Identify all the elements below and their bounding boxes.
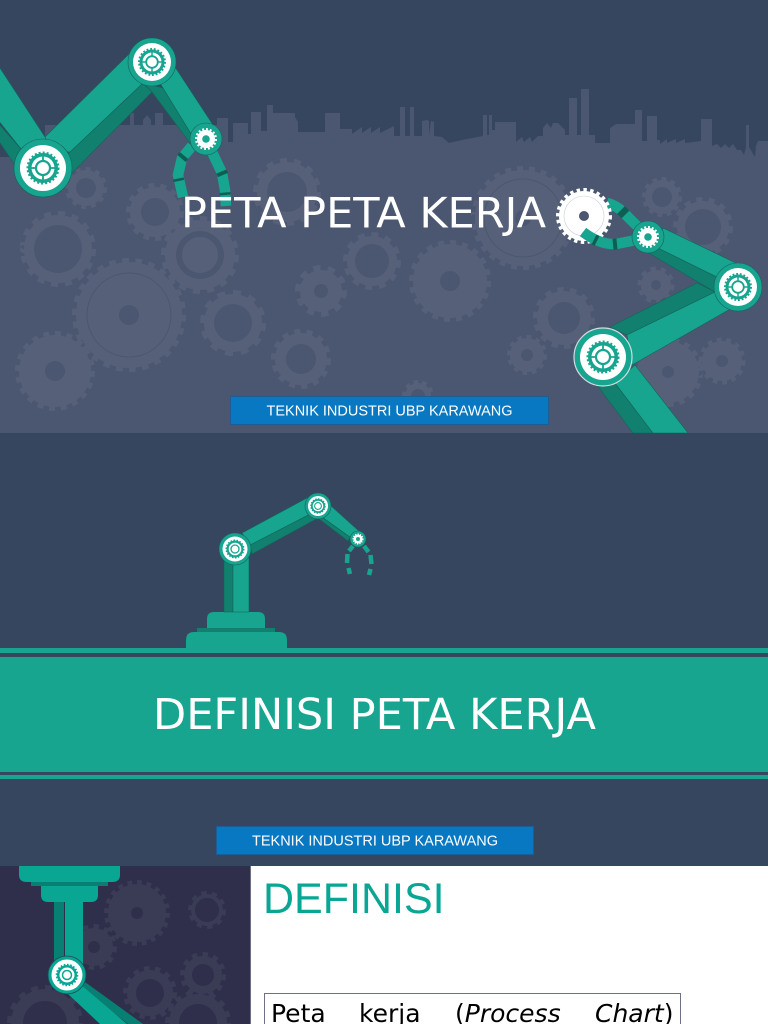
- subtitle banner: [230, 396, 548, 424]
- definition text box: [264, 994, 680, 1024]
- joint: wrist gear: [632, 221, 664, 253]
- white gear held by claw: [559, 191, 609, 241]
- joint: elbow gear: [714, 263, 762, 311]
- gripper claw left: [178, 146, 192, 197]
- subtitle banner: [216, 826, 534, 854]
- panel: section slide: [0, 433, 768, 866]
- gripper claw right: [212, 152, 226, 206]
- joint: wrist gear: [350, 531, 366, 547]
- gripper claw bottom: [583, 232, 636, 244]
- subtitle banner: TEKNIK INDUSTRI UBP KARAWANG: [252, 834, 498, 850]
- joint: gear: [48, 956, 86, 994]
- subtitle banner: TEKNIK INDUSTRI UBP KARAWANG: [266, 404, 512, 420]
- robot arm: right holding gear: [559, 191, 762, 433]
- joint: base gear: [574, 328, 632, 386]
- joint: elbow gear: [305, 493, 331, 519]
- teal title band: [0, 648, 768, 779]
- panel: definition slide left: [0, 866, 251, 1024]
- background gears: [11, 884, 227, 1024]
- joint: elbow gear: [128, 38, 176, 86]
- background gears: [19, 162, 742, 409]
- joint: large gear: [14, 139, 72, 197]
- robot arm: top left: [0, 38, 226, 206]
- robot arm on pedestal: [186, 493, 372, 648]
- panel: definition slide right: [250, 866, 768, 1024]
- gripper: [347, 546, 372, 575]
- section heading: DEFINISI PETA KERJA: [153, 691, 596, 740]
- definition heading: DEFINISI: [263, 875, 445, 923]
- title: PETA PETA KERJA: [181, 188, 546, 238]
- joint: shoulder gear: [219, 533, 251, 565]
- pedestal: [186, 612, 287, 648]
- panel: cover slide: [0, 0, 768, 433]
- hanging robot arm: [19, 866, 143, 1024]
- factory skyline: [0, 89, 768, 433]
- gripper claw top: [607, 203, 640, 229]
- joint: wrist gear: [190, 123, 222, 155]
